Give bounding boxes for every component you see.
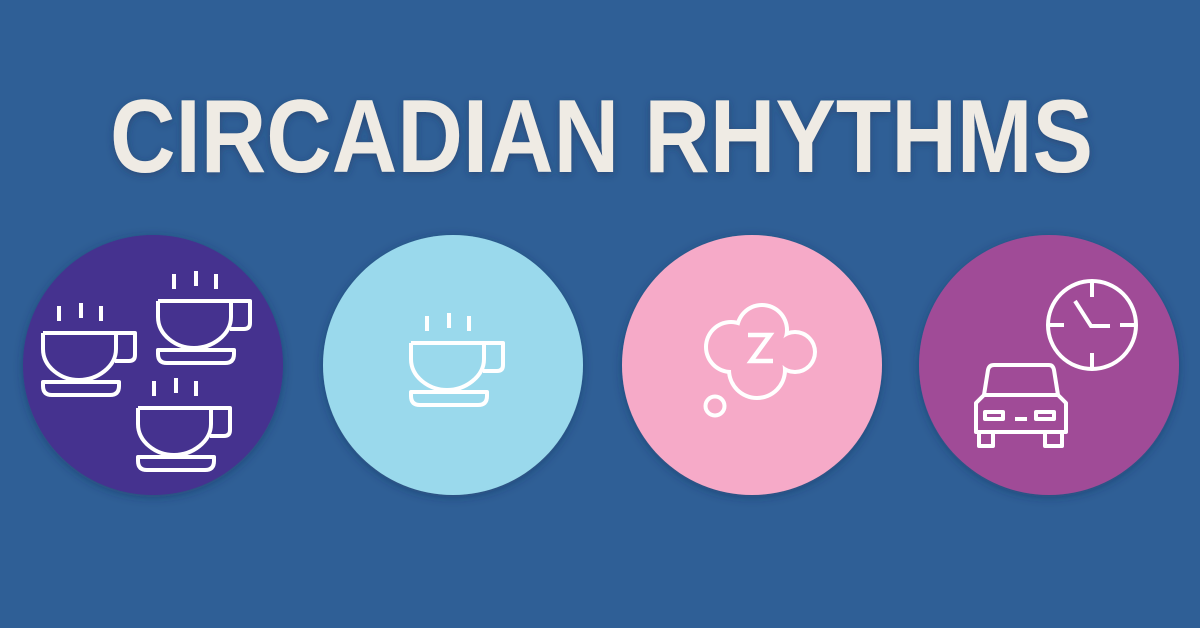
panel: single cup xyxy=(323,235,583,495)
icon: cup bottom xyxy=(138,378,230,470)
icon: car xyxy=(976,365,1066,446)
icon: cup xyxy=(411,313,503,405)
panel: three cups xyxy=(23,235,283,495)
icon: clock xyxy=(1048,281,1136,369)
panel: sleep xyxy=(622,235,882,495)
panel: car and clock xyxy=(919,235,1179,495)
icon: cup left xyxy=(43,303,135,395)
icon: cup top right xyxy=(158,271,250,363)
icon: thought cloud with Z xyxy=(704,303,817,416)
